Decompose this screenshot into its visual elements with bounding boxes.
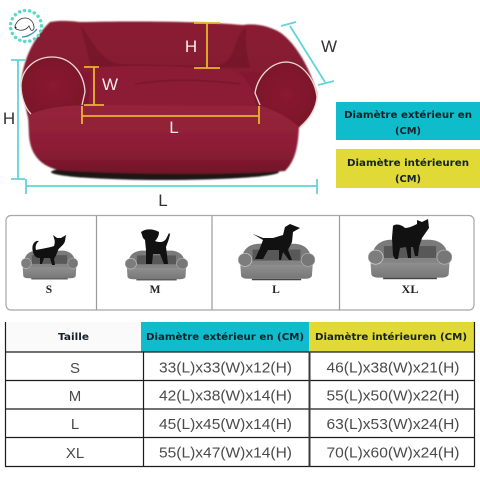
left arm roll bbox=[21, 57, 85, 114]
legend: inner diameter: (CM) bbox=[395, 174, 421, 185]
row L: L bbox=[71, 416, 79, 433]
table header: Taille bbox=[58, 332, 89, 343]
label: outer H: H bbox=[3, 109, 15, 128]
legend: inner diameter: Diamètre intérieuren bbox=[347, 157, 469, 169]
row L: 45(L)x45(W)x14(H) bbox=[159, 417, 292, 433]
row XL: 55(L)x47(W)x14(H) bbox=[159, 446, 292, 462]
table header: Diamètre extérieur en (CM) bbox=[146, 331, 304, 343]
label: outer W: W bbox=[321, 37, 337, 56]
inner height dimension bbox=[185, 23, 220, 68]
size XL: extra large dog on sofa bbox=[368, 219, 452, 296]
legend: inner diameter bbox=[336, 149, 480, 188]
label: inner H: H bbox=[185, 37, 197, 56]
table header: Diamètre intérieuren (CM) bbox=[315, 331, 467, 343]
row M: M bbox=[69, 388, 81, 405]
sofa shadow bbox=[51, 164, 279, 180]
label: inner W: W bbox=[102, 75, 118, 94]
row XL bbox=[66, 445, 460, 462]
seat cushion crease bbox=[135, 80, 240, 84]
row M: 42(L)x38(W)x14(H) bbox=[159, 388, 292, 404]
size label L: L bbox=[272, 284, 280, 296]
outer height dimension bbox=[3, 60, 25, 179]
size label M: M bbox=[150, 284, 161, 296]
logo badge bbox=[10, 10, 42, 42]
shadow behind seat bbox=[80, 24, 250, 68]
legend: outer diameter bbox=[336, 102, 480, 140]
label: inner L: L bbox=[169, 118, 179, 137]
row M: 55(L)x50(W)x22(H) bbox=[326, 388, 460, 404]
row S: S bbox=[70, 360, 80, 377]
size S: small dog on sofa bbox=[21, 235, 78, 296]
table grid bbox=[5, 322, 475, 466]
size label S: S bbox=[46, 284, 52, 296]
sofa back and arm tops bbox=[21, 21, 317, 127]
row M bbox=[69, 388, 460, 405]
row S: 46(L)x38(W)x21(H) bbox=[326, 360, 460, 376]
row L bbox=[71, 416, 460, 433]
legend: outer diameter: (CM) bbox=[395, 126, 421, 137]
size label XL: XL bbox=[402, 284, 419, 296]
size L: large dog on sofa bbox=[238, 224, 315, 296]
right arm roll bbox=[255, 62, 317, 127]
row XL: 70(L)x60(W)x24(H) bbox=[326, 446, 460, 462]
size table bbox=[5, 322, 475, 466]
table header bbox=[5, 322, 475, 352]
product photo: red sofa bbox=[21, 21, 317, 180]
row XL: XL bbox=[66, 445, 84, 462]
inner width dimension bbox=[84, 67, 118, 105]
outer width dimension bbox=[281, 22, 337, 85]
size M: medium dog on sofa bbox=[125, 229, 188, 296]
legend: outer diameter: Diamètre extérieur en bbox=[344, 109, 472, 121]
row L: 63(L)x53(W)x24(H) bbox=[326, 417, 460, 433]
row S bbox=[70, 360, 460, 377]
panel: dog size guide bbox=[6, 216, 474, 310]
outer length dimension bbox=[26, 179, 317, 210]
inner length dimension bbox=[82, 106, 259, 137]
row S: 33(L)x33(W)x12(H) bbox=[159, 360, 292, 376]
sofa front base bbox=[28, 105, 299, 174]
sofa seat cushion bbox=[88, 66, 256, 108]
label: outer L: L bbox=[158, 191, 168, 210]
